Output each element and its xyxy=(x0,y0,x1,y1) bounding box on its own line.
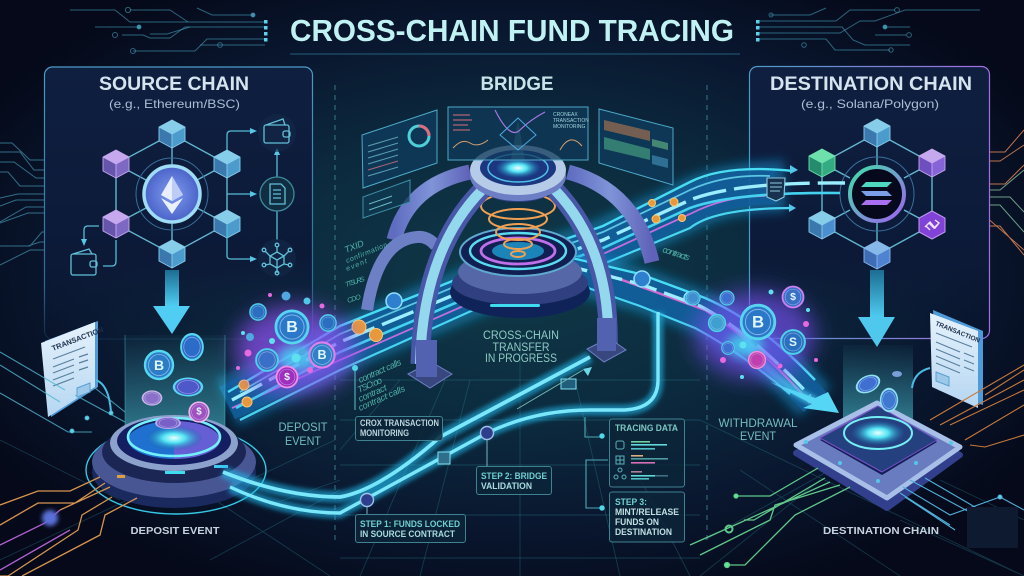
circuit: top right xyxy=(758,8,980,52)
label: cross-chain transfer: IN PROGRESS xyxy=(485,353,557,365)
glow: left cluster core xyxy=(278,346,318,370)
network: destination chain xyxy=(809,119,945,269)
arrowheads xyxy=(81,128,280,262)
annotation: contract calls: contract xyxy=(357,382,389,404)
label: withdrawal event: EVENT xyxy=(740,429,777,443)
annotation: txid xyxy=(343,238,389,305)
annotation: txid: CDO xyxy=(346,294,362,305)
icon: shield document xyxy=(767,178,785,201)
circuit: top left xyxy=(70,7,265,53)
dashed section dividers xyxy=(335,85,707,540)
coins: right cluster: $ xyxy=(790,291,796,303)
circuit: right side orange and green xyxy=(943,130,1024,255)
annotation: contract calls: contract calls xyxy=(357,357,403,385)
coins: right cluster: B xyxy=(752,312,764,332)
patch: dark square xyxy=(967,507,1018,548)
annotation: txid: event xyxy=(345,258,369,273)
trace line: main to withdrawal xyxy=(230,312,658,513)
box: step 2: STEP 2: BRIDGE xyxy=(481,471,548,482)
panel: tracing data: TRACING DATA xyxy=(615,423,678,434)
tracing icons xyxy=(614,441,626,479)
coin sparkles: right cluster xyxy=(720,290,818,379)
bridge: top ring xyxy=(470,120,566,202)
panel: tracing data xyxy=(610,419,684,487)
document: transaction left xyxy=(41,321,105,417)
bridge: feet xyxy=(408,318,626,388)
icon: document xyxy=(260,177,294,211)
circuit: chip orange right xyxy=(930,365,1024,447)
circuit: left side xyxy=(0,143,93,265)
monitor: center chart xyxy=(448,107,588,160)
label: cross-chain transfer: TRANSFER xyxy=(492,342,550,354)
box: step 3: STEP 3: xyxy=(615,497,647,508)
tracing bars xyxy=(631,441,668,480)
icon: wallet top xyxy=(258,114,296,152)
monitor chart caption: CRONEAX xyxy=(553,112,578,118)
chip: destination xyxy=(796,403,960,508)
box: crox transaction monitoring: MONITORING xyxy=(360,428,409,439)
network: source chain xyxy=(71,114,296,277)
box: step 1: IN SOURCE CONTRACT xyxy=(360,529,455,540)
light column: deposit pedestal xyxy=(125,335,225,445)
light column: destination xyxy=(843,345,913,430)
tracker: icons on path xyxy=(438,367,592,464)
label: withdrawal event xyxy=(718,416,798,443)
annotation: contract calls: TSO:oo xyxy=(356,375,384,395)
trace line: main to bridge foot xyxy=(223,357,590,497)
orange coins on stream xyxy=(239,198,686,407)
coin sparkles: left cluster xyxy=(236,292,324,373)
annotation: contract calls xyxy=(356,357,407,413)
monitor: left dashboard xyxy=(362,110,437,188)
bridge: front arches xyxy=(420,190,608,364)
panel: destination chain xyxy=(750,66,990,338)
blue stream coins xyxy=(386,271,696,309)
annotation: txid: TTSURS xyxy=(344,276,366,289)
coins: falling onto pedestal: B xyxy=(154,357,164,373)
bridge: back arches xyxy=(367,172,652,310)
box: step 3: FUNDS ON xyxy=(615,517,659,528)
icon: network xyxy=(258,239,296,277)
label: cross-chain transfer xyxy=(483,330,559,365)
bridge: vortex core xyxy=(481,193,555,272)
connectors to boxes xyxy=(355,368,608,508)
glow: right coin cluster xyxy=(695,291,815,379)
monitor chart caption 3: MONITORING xyxy=(553,124,586,130)
subtitle: destination chain: (e.g., Solana/Polygon) xyxy=(801,97,939,111)
monitor chart caption 2: TRANSACTION xyxy=(553,118,589,124)
coins: left cluster: B xyxy=(286,318,298,336)
label: withdrawal event: WITHDRAWAL xyxy=(718,416,798,430)
arrow: destination to withdrawal xyxy=(858,270,895,347)
tracker nodes xyxy=(360,426,494,514)
blockchain cubes xyxy=(103,120,240,268)
coins: right cluster xyxy=(686,286,805,368)
box: step 3: MINT/RELEASE xyxy=(615,507,680,518)
label: deposit event bottom: DEPOSIT EVENT xyxy=(130,525,220,537)
doc heading: TRANSACTION xyxy=(934,320,981,345)
box: crox transaction monitoring xyxy=(356,416,442,440)
pedestal: deposit event xyxy=(86,415,266,514)
connector dots xyxy=(352,365,605,511)
heading: bridge: BRIDGE xyxy=(480,74,554,95)
panel: source chain xyxy=(44,67,312,339)
circuit: chip blue right xyxy=(900,478,1024,530)
arrow: withdrawal to chip xyxy=(745,340,839,413)
doc heading: TRANSACTION xyxy=(50,325,105,353)
blockchain cubes xyxy=(809,119,945,269)
annotation: txid: TXID xyxy=(343,238,366,255)
circuit terminals: top right xyxy=(756,20,760,42)
box: step 3 xyxy=(610,492,684,542)
coins: destination xyxy=(854,371,902,414)
circuit: pedestal to document xyxy=(0,352,125,433)
arrow: pedestal to document left xyxy=(96,380,111,412)
label: deposit event side: EVENT xyxy=(285,434,322,448)
box: step 3: DESTINATION xyxy=(615,527,672,538)
chip node: bottom left xyxy=(42,510,58,526)
box: step 2 xyxy=(476,466,552,494)
connector arrows xyxy=(84,131,277,266)
monitor: lower left panel xyxy=(363,180,410,218)
coins: left cluster xyxy=(250,304,336,388)
annotation: contract calls: contract calls xyxy=(357,383,407,413)
annotation: txid: confirmation xyxy=(345,242,389,265)
coins: right cluster: S xyxy=(789,335,797,349)
icon: wallet bottom xyxy=(71,249,97,275)
label: cross-chain transfer: CROSS-CHAIN xyxy=(483,330,559,342)
circuit: chip green left xyxy=(690,468,850,568)
box: crox transaction monitoring: CROX TRANSACTION xyxy=(360,418,439,429)
bridge: lower vortex base xyxy=(450,228,590,318)
subtitle: source chain: (e.g., Ethereum/BSC) xyxy=(109,97,240,111)
heading: source chain: SOURCE CHAIN xyxy=(99,74,249,95)
glow: left coin cluster xyxy=(235,306,355,394)
flow arrows into destination chain xyxy=(767,165,798,212)
document: transaction right xyxy=(930,310,983,408)
flow stream: upper ribbon to destination xyxy=(227,169,845,420)
flow stream: lower ribbon from bridge xyxy=(555,254,815,403)
icon: ethereum hub xyxy=(136,158,208,230)
circuit: bottom left orange xyxy=(0,477,137,576)
icon: solana hub xyxy=(840,157,914,231)
heading: destination chain: DESTINATION CHAIN xyxy=(770,74,972,95)
icon: polygon token xyxy=(919,211,945,239)
glow: right cluster core xyxy=(727,333,763,357)
arrow: chip to document right xyxy=(912,368,930,388)
coins: left cluster: $ xyxy=(284,371,290,383)
label: destination chain bottom: DESTINATION CHAIN xyxy=(823,525,939,537)
box: step 1: STEP 1: FUNDS LOCKED xyxy=(360,519,460,530)
label: deposit event side xyxy=(278,420,328,448)
box: step 1 xyxy=(356,514,466,542)
title: CROSS-CHAIN FUND TRACING xyxy=(290,13,734,48)
circuit terminals: top left xyxy=(264,20,268,42)
title rule xyxy=(290,53,740,55)
label: deposit event side: DEPOSIT xyxy=(278,420,328,434)
floor grid xyxy=(0,340,1024,576)
coins: falling onto pedestal xyxy=(142,334,209,429)
box: step 2: VALIDATION xyxy=(481,481,532,492)
annotation: contracts: contracts xyxy=(661,244,692,263)
arrow: source to deposit xyxy=(153,270,190,334)
coins: falling onto pedestal: $ xyxy=(196,407,202,417)
monitor: right code xyxy=(599,109,673,185)
coins: left cluster: B xyxy=(317,348,327,362)
